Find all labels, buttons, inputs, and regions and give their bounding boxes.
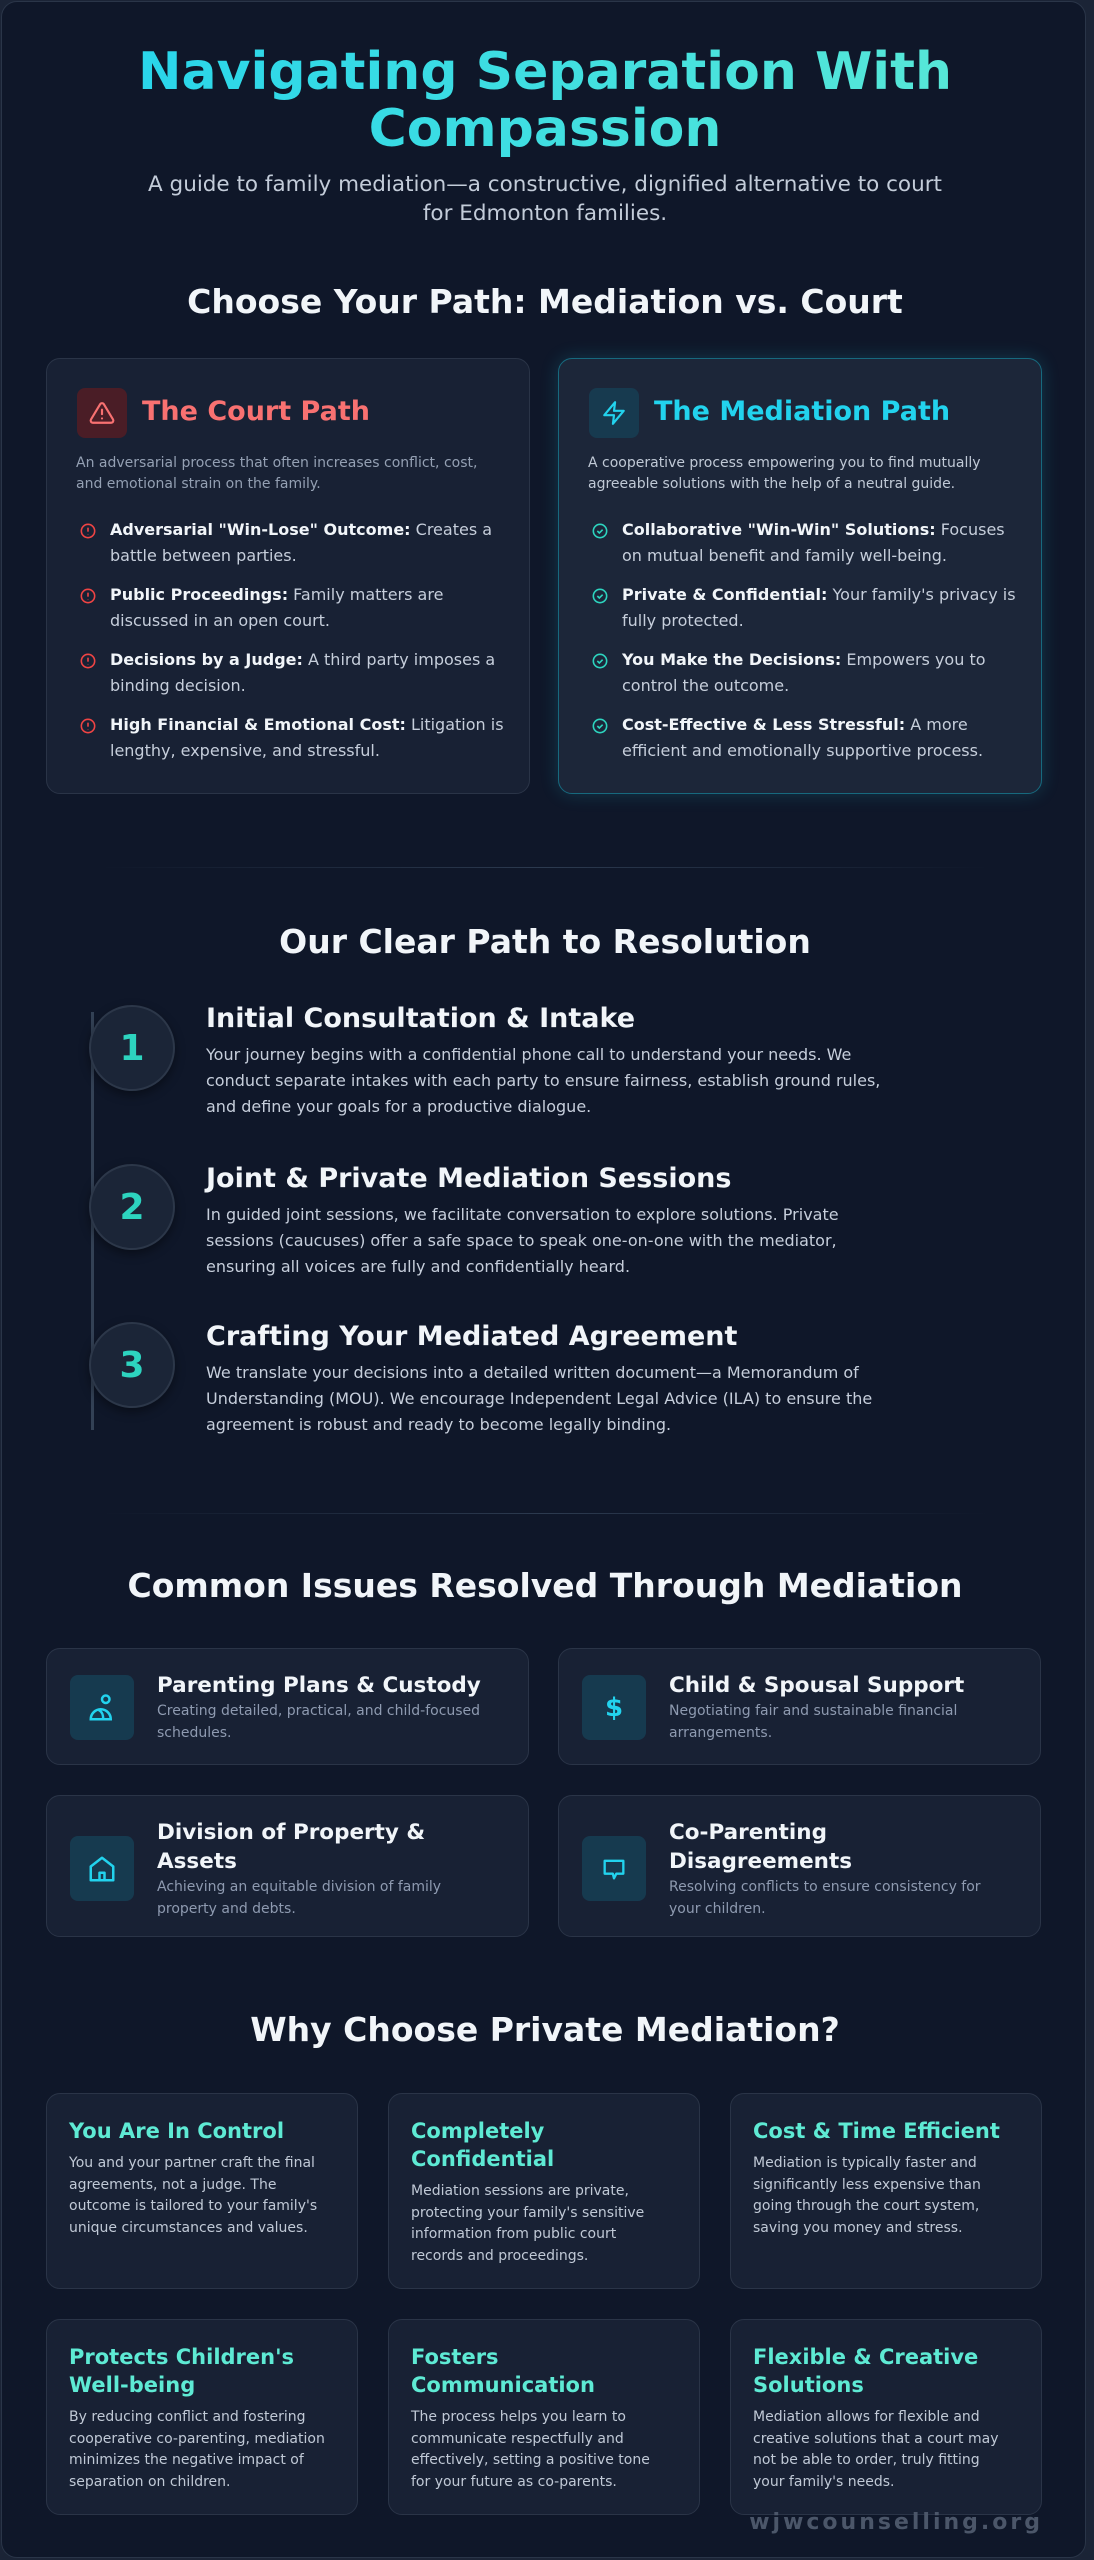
icon: number 1: 1	[119, 1028, 145, 1068]
list: mediation benefits	[592, 520, 1016, 760]
title: Division of Property & Assets	[157, 1820, 425, 1874]
footer: website: wjwcounselling.org	[749, 2510, 1043, 2535]
timeline: process steps	[91, 1012, 94, 1430]
icon: dollar: $	[605, 1692, 623, 1722]
card: children: Protects Children's Well-being	[69, 2345, 294, 2397]
title: Navigating Separation With	[138, 42, 952, 102]
icon: dollar	[582, 1675, 646, 1740]
card: property	[46, 1795, 529, 1937]
title: Parenting Plans & Custody	[157, 1673, 481, 1698]
subtitle: A guide to family mediation—a constructive, dignified alternative to court for Edmonton families.	[148, 172, 942, 226]
card: flexible: Flexible & Creative Solutions	[753, 2345, 978, 2397]
list: mediation benefits: You Make the Decisions: Empowers you to control the outcome.	[622, 650, 986, 694]
title	[138, 42, 952, 159]
step text: We translate your decisions into a detailed written document—a Memorandum of Understanding (MOU). We encourage Independent Legal Advice (ILA) to ensure the agreement is robust and ready to become legally binding.	[206, 1363, 872, 1434]
description: Negotiating fair and sustainable financial arrangements.	[669, 1703, 957, 1741]
description: Creating detailed, practical, and child-focused schedules.	[157, 1703, 480, 1741]
list: court drawbacks: Decisions by a Judge: A third party imposes a binding decision.	[110, 650, 495, 694]
step 2	[89, 1163, 839, 1276]
card: flexible: Mediation allows for flexible and creative solutions that a court may not be able to order, truly fitting your family's needs.	[753, 2409, 998, 2490]
icon: number 2: 2	[119, 1186, 145, 1228]
icon: number 3	[89, 1322, 175, 1408]
card: cost	[730, 2093, 1042, 2289]
description: Achieving an equitable division of family property and debts.	[157, 1879, 441, 1917]
icon: child	[70, 1675, 134, 1740]
step title: Initial Consultation & Intake	[206, 1003, 635, 1034]
step 3	[89, 1321, 872, 1434]
heading: process: Our Clear Path to Resolution	[279, 922, 811, 961]
list: court drawbacks: Public Proceedings: Family matters are discussed in an open court.	[110, 585, 443, 630]
card: in control	[46, 2093, 358, 2289]
icon: number 2	[89, 1164, 175, 1250]
heading: common issues: Common Issues Resolved Through Mediation	[127, 1566, 963, 1605]
step text: Your journey begins with a confidential phone call to understand your needs. We conduct separate intakes with each party to ensure fairness, establish ground rules, and define your goals for a productive dialogue.	[206, 1045, 880, 1116]
text: mediation description: A cooperative process empowering you to find mutually agreeable solutions with the help of a neutral guide.	[588, 455, 981, 492]
card: children	[46, 2319, 358, 2515]
icon: number 3: 3	[119, 1344, 145, 1386]
card: cost: Cost & Time Efficient	[753, 2119, 1000, 2143]
title: Co-Parenting Disagreements	[669, 1820, 852, 1874]
card: in control: You and your partner craft the final agreements, not a judge. The outcome is tailored to your family's unique circumstances and values.	[69, 2155, 317, 2236]
card: in control: You Are In Control	[69, 2119, 284, 2143]
card: children: By reducing conflict and fostering cooperative co-parenting, mediation minimizes the negative impact of separation on children.	[69, 2409, 325, 2490]
list: court drawbacks	[80, 520, 504, 760]
list: mediation benefits: Cost-Effective & Less Stressful: A more efficient and emotionally supportive process.	[622, 715, 983, 760]
card: flexible	[730, 2319, 1042, 2515]
icon: house	[70, 1836, 134, 1901]
list: court drawbacks: Adversarial "Win-Lose" Outcome: Creates a battle between parties.	[110, 520, 492, 564]
card: support	[558, 1648, 1041, 1765]
card: confidential: Completely Confidential	[411, 2119, 554, 2171]
heading: mediation path: The Mediation Path	[654, 396, 950, 427]
step title: Joint & Private Mediation Sessions	[206, 1163, 731, 1194]
card: confidential: Mediation sessions are private, protecting your family's sensitive information from public court records and proceedings.	[411, 2183, 644, 2264]
text: court description: An adversarial process that often increases conflict, cost, and emotional strain on the family.	[76, 455, 477, 492]
icon: lightning	[589, 388, 639, 438]
panel: mediation path	[558, 358, 1042, 794]
list: mediation benefits: Private & Confidential: Your family's privacy is fully protected.	[622, 585, 1016, 630]
card: confidential	[388, 2093, 700, 2289]
panel: court path	[46, 358, 530, 794]
heading: why mediation: Why Choose Private Mediation?	[250, 2010, 840, 2049]
card: parenting	[46, 1648, 529, 1765]
step text: In guided joint sessions, we facilitate conversation to explore solutions. Private sessions (caucuses) offer a safe space to speak one-on-one with the mediator, ensuring all voices are fully and confidentially heard.	[206, 1205, 839, 1276]
title: Child & Spousal Support	[669, 1673, 964, 1698]
description: Resolving conflicts to ensure consistency for your children.	[669, 1879, 981, 1917]
step title: Crafting Your Mediated Agreement	[206, 1321, 737, 1352]
card: co-parenting	[558, 1795, 1041, 1937]
list: court drawbacks: High Financial & Emotional Cost: Litigation is lengthy, expensive, and stressful.	[110, 715, 504, 760]
list: mediation benefits: Collaborative "Win-Win" Solutions: Focuses on mutual benefit and family well-being.	[622, 520, 1005, 564]
card: cost: Mediation is typically faster and significantly less expensive than going through the court system, saving you money and stress.	[753, 2155, 981, 2236]
heading: choose your path: Choose Your Path: Mediation vs. Court	[187, 282, 903, 321]
title: Compassion	[369, 99, 721, 159]
icon: number 1	[89, 1005, 175, 1091]
step 1	[89, 1003, 880, 1116]
card: communication: The process helps you learn to communicate respectfully and effectively, setting a positive tone for your future as co-parents.	[411, 2409, 650, 2490]
icon: warning	[77, 388, 127, 438]
icon: speech bubble	[582, 1836, 646, 1901]
card: communication	[388, 2319, 700, 2515]
heading: court path: The Court Path	[142, 396, 370, 427]
card: communication: Fosters Communication	[411, 2345, 595, 2397]
